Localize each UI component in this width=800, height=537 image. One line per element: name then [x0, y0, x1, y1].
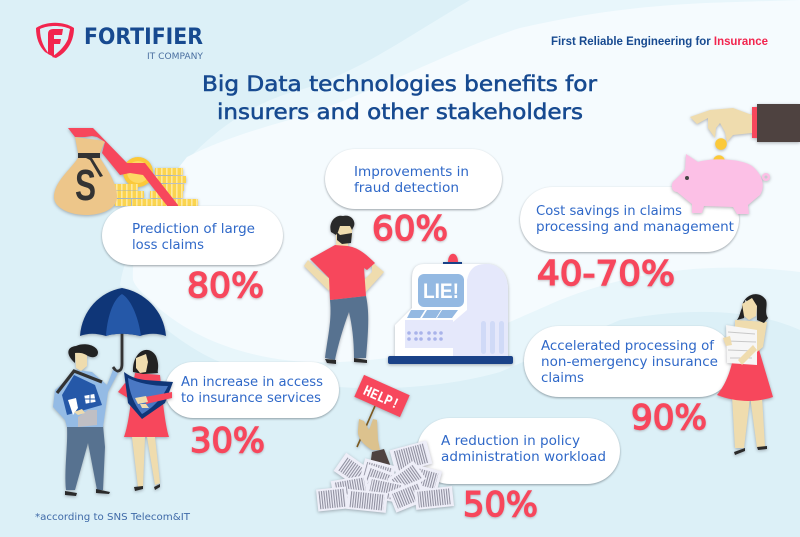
- woman face: [136, 354, 148, 373]
- umbrella handle: [113, 330, 122, 371]
- shirt: [310, 245, 375, 300]
- text: fraud detection: [354, 181, 459, 196]
- umbrella centre panel: [106, 294, 141, 336]
- bubble: [165, 362, 339, 418]
- hair: [330, 216, 354, 235]
- illustration: couple under umbrella: [53, 288, 173, 496]
- bubble: [417, 418, 620, 484]
- logo name: FORTIFIER: [84, 25, 203, 50]
- text: to insurance services: [181, 391, 321, 406]
- pig: [672, 154, 763, 214]
- coin in slot: [713, 155, 725, 167]
- man legs: [65, 425, 105, 490]
- alarm light: [448, 254, 458, 262]
- house roof: [57, 371, 102, 393]
- coin in hand: [715, 138, 727, 150]
- sleeve: [757, 104, 800, 142]
- dollar sign: S: [75, 161, 96, 210]
- text: administration workload: [441, 450, 606, 465]
- text: An increase in access: [181, 375, 323, 390]
- illustration: paper pile and help sign: [316, 375, 454, 513]
- value: 60%: [372, 209, 448, 249]
- text: claims: [541, 371, 584, 386]
- bubble: [102, 206, 283, 265]
- pants: [325, 296, 368, 360]
- arms: [304, 260, 384, 294]
- cuff: [752, 107, 757, 138]
- title: Big Data technologies benefits for: [202, 72, 597, 96]
- text: [536, 204, 734, 235]
- man hair: [68, 344, 98, 363]
- paper sheets: [316, 440, 454, 513]
- house window: [84, 394, 96, 404]
- skirt: [717, 343, 773, 401]
- woman legs: [132, 437, 160, 487]
- panel: reduction in workload: [417, 418, 620, 525]
- text: A reduction in policy: [441, 434, 580, 449]
- text: loss claims: [132, 238, 204, 253]
- text: Prediction of large: [132, 222, 255, 237]
- neck: [336, 232, 348, 248]
- woman hair: [133, 350, 158, 374]
- tagline: First Reliable Engineering for Insurance: [551, 34, 768, 48]
- panel: accelerated processing: [524, 326, 734, 438]
- text: [181, 375, 323, 406]
- text: [441, 434, 606, 465]
- torso: [735, 320, 767, 362]
- face: [338, 222, 352, 238]
- icon: shield: [36, 23, 74, 58]
- bubble: [520, 187, 739, 252]
- value: 40-70%: [537, 254, 675, 294]
- panel: prediction of large loss claims: [102, 206, 283, 306]
- side panel: [453, 264, 508, 358]
- illustration: woman holding papers: [717, 294, 773, 455]
- woman forearm: [145, 392, 172, 404]
- eye: [685, 176, 689, 180]
- shield: [124, 372, 173, 419]
- machine body: [395, 264, 508, 358]
- paper stack: [726, 325, 757, 365]
- logo subtitle: IT COMPANY: [147, 52, 204, 62]
- hand: [358, 419, 380, 450]
- text: non-emergency insurance: [541, 355, 718, 370]
- screen: [418, 274, 464, 307]
- panel: cost savings: [520, 187, 739, 294]
- keys: [407, 310, 458, 318]
- money bag: [54, 137, 117, 215]
- vents: [481, 321, 504, 354]
- keypad: [405, 320, 453, 348]
- value: 80%: [187, 266, 264, 306]
- text: [541, 339, 718, 386]
- sleeve: [370, 449, 391, 467]
- icon: letter F: [48, 29, 63, 57]
- tail: [763, 174, 769, 180]
- text: processing and management: [536, 220, 734, 235]
- man neck and face: [75, 352, 87, 371]
- illustration: lie detector machine: [388, 254, 513, 364]
- umbrella canopy: [80, 288, 166, 336]
- footnote: *according to SNS Telecom&IT: [35, 512, 191, 523]
- base: [388, 356, 513, 364]
- document and hand: [68, 398, 78, 415]
- man shoes: [65, 489, 110, 496]
- beard: [337, 232, 352, 244]
- value: 90%: [631, 398, 707, 438]
- sign word: HELP!: [360, 383, 402, 414]
- sign stick: [357, 406, 375, 447]
- bubble: [325, 149, 502, 209]
- text: Accelerated processing of: [541, 339, 714, 354]
- woman shoes: [134, 484, 160, 491]
- title: insurers and other stakeholders: [217, 100, 583, 124]
- hand: [723, 336, 732, 346]
- title: [202, 72, 597, 124]
- panel: fraud detection: [325, 149, 502, 249]
- legs: [732, 396, 765, 448]
- logo: [36, 23, 204, 62]
- woman dress: [124, 373, 169, 437]
- arm: [738, 345, 757, 365]
- illustration: money bag and falling arrow: [54, 128, 198, 218]
- illustration: piggy bank and hand: [672, 104, 800, 214]
- hand: [690, 108, 752, 142]
- woman arm: [118, 383, 140, 404]
- shoes: [734, 446, 767, 455]
- woman hand: [135, 396, 149, 408]
- value: 50%: [463, 485, 538, 525]
- man jacket: [53, 370, 118, 427]
- screen word: LIE!: [423, 280, 459, 303]
- man shirt: [78, 410, 97, 427]
- face: [742, 298, 757, 320]
- value: 30%: [190, 421, 265, 461]
- shoes: [325, 358, 367, 364]
- text: [354, 165, 469, 196]
- bag tie: [78, 153, 103, 177]
- coin stacks: [113, 157, 198, 206]
- text: [132, 222, 255, 253]
- panel: access to insurance: [165, 362, 339, 461]
- falling arrow: [68, 128, 178, 218]
- house: [62, 375, 102, 415]
- bubble: [524, 326, 734, 397]
- hair: [737, 294, 768, 323]
- illustration: man: [304, 216, 384, 364]
- text: Improvements in: [354, 165, 469, 180]
- text: Cost savings in claims: [536, 204, 682, 219]
